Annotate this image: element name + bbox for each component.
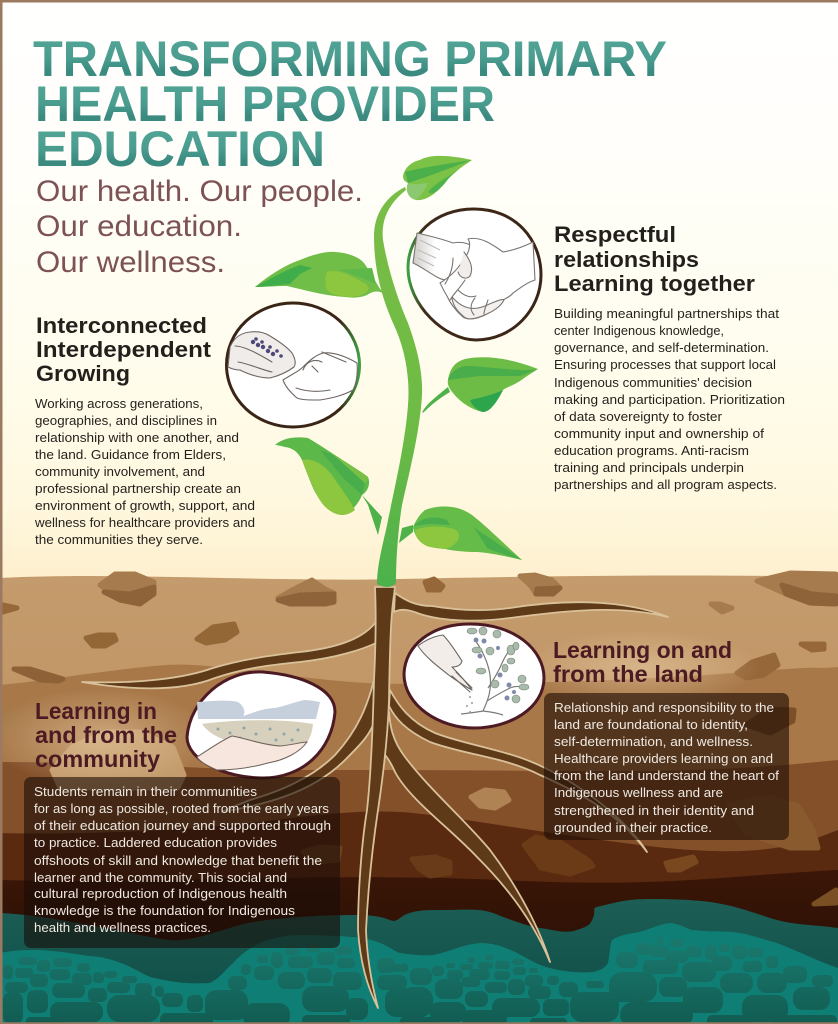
- root: deep right branch: [383, 712, 550, 962]
- title: EDUCATION: [35, 121, 325, 177]
- panel: learning in the community: Students remain in their communities: [34, 784, 257, 799]
- panel: learning on the land: self-determination, and wellness.: [554, 734, 753, 749]
- heading haze right: [520, 630, 760, 706]
- heading: learning on and from the land: Learning on and: [553, 637, 732, 663]
- soil layer 1: [0, 576, 838, 1024]
- subtitle: Our education.: [36, 210, 242, 243]
- rocks: [3, 573, 836, 904]
- illustration: land planting circle: [404, 624, 544, 728]
- text: respectful relationships body: Indigenous communities' decision: [554, 375, 752, 390]
- heading: respectful relationships: Learning together: [554, 271, 755, 296]
- text: interconnected body: the land. Guidance from Elders,: [35, 447, 226, 462]
- text: interconnected body: Working across generations,: [35, 396, 203, 411]
- heading: learning on and from the land: [553, 637, 732, 687]
- cobblestones: [3, 937, 837, 1024]
- illustration: seeds in hands circle: [226, 303, 360, 427]
- panel: learning in the community: offshoots of skill and knowledge that benefit the: [34, 853, 322, 868]
- illustration: community in hands circle: [187, 672, 335, 778]
- title: HEALTH PROVIDER: [35, 76, 495, 132]
- text: respectful relationships body: Building meaningful partnerships that: [554, 306, 779, 321]
- text: respectful relationships body: education programs. Anti-racism: [554, 443, 749, 458]
- pale rock behind heading: [52, 732, 184, 788]
- panel: learning on the land: land are foundational to identity,: [554, 717, 748, 732]
- panel: learning in the community: for as long as possible, rooted from the early years: [34, 801, 329, 816]
- heading: learning in and from the community: [35, 698, 177, 772]
- text: interconnected body: geographies, and disciplines in: [35, 413, 217, 428]
- text: respectful relationships body: [554, 306, 785, 492]
- soil layer 5: [0, 870, 838, 1024]
- text: respectful relationships body: Ensuring processes that support local: [554, 357, 776, 372]
- text: respectful relationships body: center Indigenous knowledge,: [554, 323, 724, 338]
- text: respectful relationships body: training and principals underpin: [554, 460, 744, 475]
- heading: learning in and from the community: community: [35, 746, 160, 772]
- heading: respectful relationships: Respectful: [554, 222, 676, 247]
- heading: learning in and from the community: and from the: [35, 722, 177, 748]
- panel: learning in the community: cultural reproduction of Indigenous health: [34, 886, 287, 901]
- soil and water strata: [0, 573, 838, 1024]
- text: interconnected body: the communities they serve.: [35, 532, 203, 547]
- panel: learning on the land: from the land understand the heart of: [554, 768, 779, 783]
- light teal layer: [0, 923, 838, 1024]
- panel: learning on the land: strengthened in their identity and: [554, 803, 754, 818]
- text: interconnected body: [34, 396, 255, 547]
- text: respectful relationships body: partnerships and all program aspects.: [554, 477, 777, 492]
- subtitle: [36, 175, 363, 279]
- text: respectful relationships body: of data sovereignty to foster: [554, 409, 723, 424]
- root: taproot: [358, 587, 395, 1008]
- background sky: [0, 0, 838, 590]
- panel: learning in the community: [24, 777, 340, 948]
- root: lower left branch: [222, 676, 375, 812]
- root: far left branch: [82, 622, 378, 688]
- panel: learning on the land: Indigenous wellness and are: [554, 785, 723, 800]
- title: TRANSFORMING PRIMARY: [33, 31, 667, 87]
- heading: interconnected: [36, 313, 212, 386]
- panel: learning in the community: health and wellness practices.: [34, 920, 211, 935]
- text: respectful relationships body: community input and ownership of: [554, 426, 764, 441]
- text: respectful relationships body: governance, and self-determination.: [554, 340, 769, 355]
- text: interconnected body: wellness for healthcare providers and: [34, 515, 255, 530]
- plant: [255, 156, 538, 587]
- root: mid right branch: [389, 690, 647, 852]
- text: respectful relationships body: making and participation. Prioritization: [554, 392, 785, 407]
- soil layer 2: [0, 665, 838, 1024]
- illustration: handshake circle: [408, 209, 541, 340]
- panel: learning on the land: Healthcare providers learning on and: [554, 751, 773, 766]
- soil layer 4: [0, 811, 838, 1024]
- panel: learning on the land: grounded in their practice.: [554, 820, 712, 835]
- text: interconnected body: community involvement, and: [35, 464, 205, 479]
- leaf: upper left: [255, 252, 383, 298]
- panel: learning on the land: [544, 693, 789, 840]
- heading: respectful relationships: [554, 222, 755, 296]
- heading haze: [0, 688, 210, 788]
- heading: learning in and from the community: Learning in: [35, 698, 157, 724]
- stem: [374, 187, 422, 587]
- root: surface right branch: [394, 593, 668, 621]
- panel: learning in the community: to practice. Laddered education provides: [34, 835, 277, 850]
- roots: [82, 587, 668, 1008]
- panel: learning in the community: knowledge is the foundation for Indigenous: [34, 903, 295, 918]
- leaf: lower left: [275, 437, 382, 535]
- subtitle: Our health. Our people.: [36, 175, 363, 208]
- leaf: lower right: [399, 506, 522, 560]
- panel: learning on the land: Relationship and responsibility to the: [554, 700, 774, 715]
- text: interconnected body: environment of growth, support, and: [35, 498, 255, 513]
- text: interconnected body: professional partnership create an: [35, 481, 241, 496]
- subtitle: Our wellness.: [36, 246, 225, 279]
- heading: learning on and from the land: from the land: [553, 661, 703, 687]
- leaf: top: [403, 156, 472, 200]
- text: interconnected body: relationship with one another, and: [35, 430, 239, 445]
- panel: learning in the community: of their education journey and supported through: [34, 818, 331, 833]
- title: [33, 31, 667, 177]
- heading: interconnected: Interconnected: [36, 313, 207, 338]
- dark teal water layer: [0, 899, 838, 1024]
- leaf: right: [422, 357, 538, 413]
- heading: interconnected: Interdependent: [36, 337, 212, 362]
- heading: interconnected: Growing: [36, 361, 130, 386]
- panel: learning in the community: learner and the community. This social and: [34, 870, 287, 885]
- soil layer 3: [0, 760, 838, 1024]
- heading: respectful relationships: relationships: [554, 247, 699, 272]
